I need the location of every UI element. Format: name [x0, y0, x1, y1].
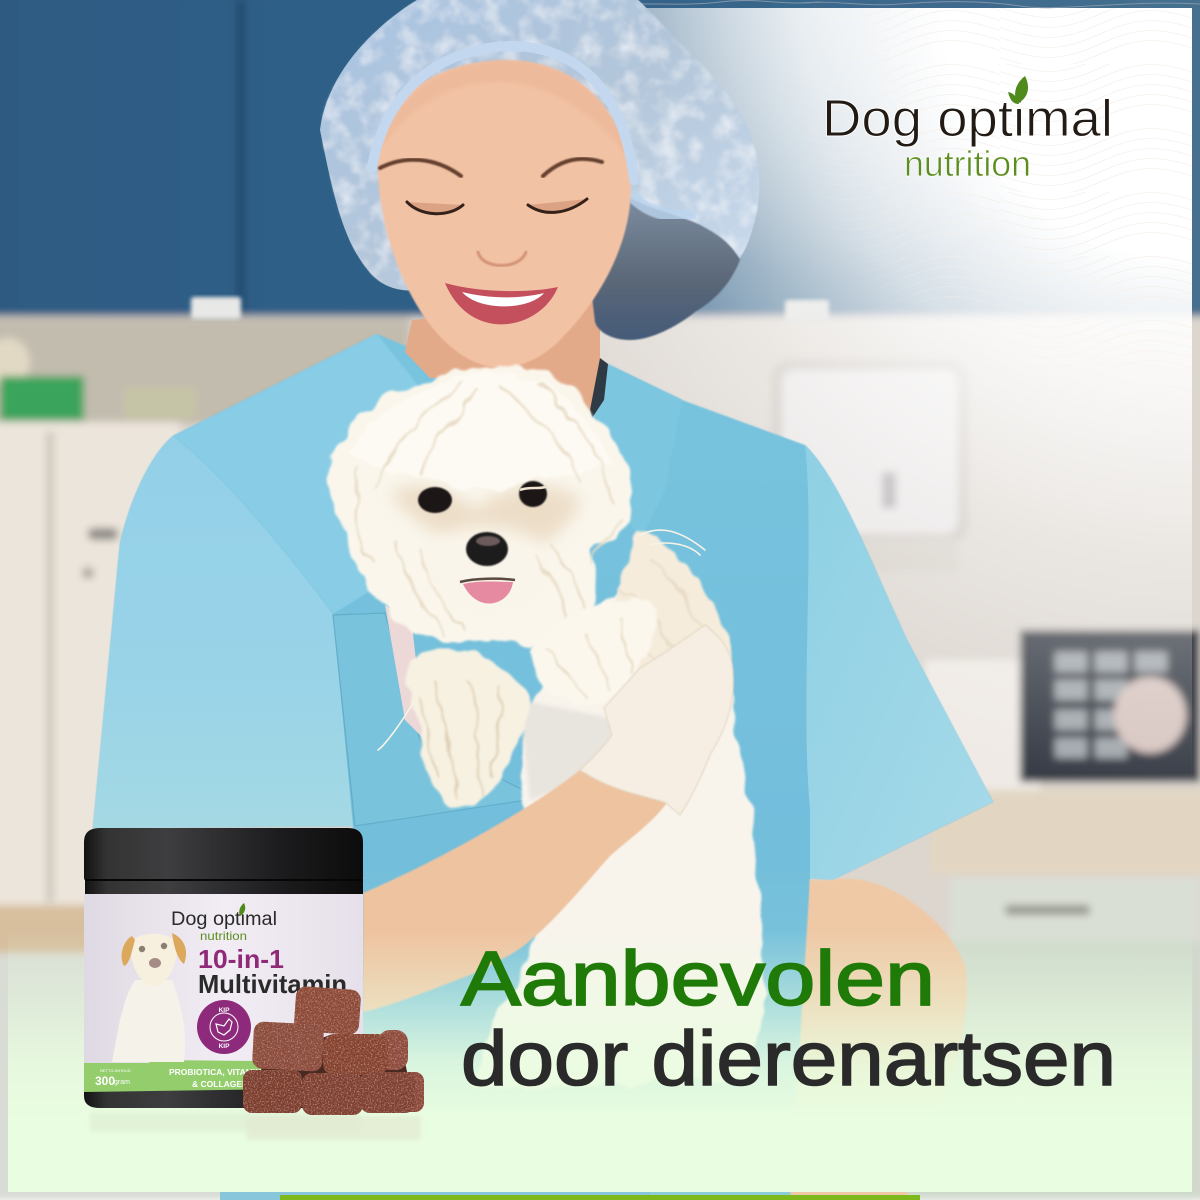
dog front leg left	[407, 650, 527, 806]
white box on counter	[925, 660, 1040, 830]
logo wordmark: Dog optimal	[822, 90, 1113, 148]
dog body on label	[112, 980, 185, 1062]
left counter	[0, 905, 290, 953]
tongue	[463, 582, 513, 603]
dog nose	[149, 958, 161, 968]
dog chest shadow	[520, 700, 620, 800]
dog muzzle	[417, 526, 553, 614]
logo sub-wordmark: nutrition	[904, 143, 1031, 184]
jar title Multivitamin: Multivitamin	[198, 969, 347, 999]
mouth line	[460, 579, 515, 582]
eye left	[418, 487, 452, 513]
hairnet upper	[320, 0, 759, 300]
dog fringe	[345, 371, 615, 490]
dog ear left	[122, 936, 135, 966]
scrubs top	[93, 334, 993, 1200]
right sleeve	[805, 445, 993, 880]
headline line 1: Aanbevolen	[461, 936, 935, 1022]
gap shadow between chews	[260, 1035, 410, 1100]
drawer handle	[1005, 905, 1090, 915]
top chew	[293, 986, 361, 1035]
weight: 300	[95, 1074, 115, 1088]
chew treats	[243, 986, 424, 1115]
dog wisps	[378, 530, 705, 750]
green fade overlay at bottom	[8, 930, 1192, 1192]
eye right	[528, 199, 587, 212]
band text line 2: & COLLAGEEN	[192, 1079, 254, 1089]
flavour badge	[197, 1000, 251, 1054]
left middle chew	[252, 1021, 324, 1072]
lower left unit	[0, 953, 290, 1200]
bottom middle chew	[302, 1073, 363, 1115]
weight unit: gram	[114, 1079, 130, 1086]
woman in blue scrubs	[93, 0, 993, 1200]
dog head	[328, 366, 633, 645]
right counter top	[930, 790, 1200, 875]
dog fur strokes	[355, 385, 715, 670]
eye left	[407, 202, 463, 214]
collar dark strip	[590, 358, 608, 418]
headline	[461, 936, 1116, 1102]
bottom left chew	[243, 1070, 302, 1113]
jar neck	[85, 880, 363, 896]
lower right unit	[800, 940, 1200, 1200]
dog face tan shading	[390, 486, 582, 556]
shoulder yoke	[173, 334, 430, 614]
dog head on label	[130, 934, 177, 987]
nose highlight	[476, 536, 500, 546]
jar neck shadow line	[85, 879, 363, 881]
jar green band	[84, 1060, 363, 1092]
badge chicken	[216, 1019, 232, 1035]
jar reflection	[90, 1112, 360, 1132]
solid band	[8, 1119, 1192, 1192]
treats reflection	[246, 1116, 421, 1140]
white fade overlay top right with wave pattern	[600, 8, 1192, 764]
dog front paw right	[530, 600, 654, 707]
dog shoulder fur	[616, 530, 732, 681]
top haze	[8, 8, 1192, 408]
frame edge wave strokes	[600, 0, 1200, 8]
dog ear right	[172, 933, 186, 964]
hairline shade	[380, 60, 630, 160]
left sleeve	[93, 436, 353, 828]
jar lid	[84, 828, 363, 881]
fade band	[8, 930, 1192, 1120]
dog eyes	[139, 943, 167, 952]
badge text bottom: KIP	[219, 1043, 230, 1050]
right forearm	[790, 879, 967, 1200]
jar logo nutrition: nutrition	[200, 929, 247, 943]
centre middle chew	[323, 1034, 388, 1075]
dog paw fur	[550, 620, 630, 700]
beige wall band	[0, 316, 1200, 1200]
logo: Dog optimal nutrition	[822, 76, 1113, 184]
mouth	[445, 283, 558, 324]
far right chew	[398, 1072, 424, 1112]
nose	[478, 252, 526, 266]
jar label dog	[112, 933, 186, 1062]
collar right	[590, 359, 682, 540]
neck	[405, 300, 600, 415]
face	[378, 60, 631, 367]
cabinet handle right	[785, 300, 829, 322]
dispenser window	[882, 472, 896, 508]
teeth	[462, 292, 544, 306]
pocket	[333, 613, 540, 826]
badge text top: KIP	[219, 1007, 230, 1014]
bottom right chew	[360, 1072, 415, 1113]
jar label	[84, 894, 363, 1064]
bottom edge photo strip	[220, 1192, 650, 1200]
eyebrow right	[543, 159, 602, 176]
appliance slot	[88, 528, 118, 540]
paper dispenser	[782, 370, 958, 534]
chew small right	[378, 1030, 408, 1070]
nose	[466, 532, 508, 566]
appliance button	[82, 567, 94, 579]
dark basket	[1020, 630, 1200, 782]
eyebrow left	[380, 160, 461, 176]
dispenser shelf	[858, 538, 958, 572]
dog body	[470, 580, 765, 1090]
paper dispenser shadow edge	[772, 360, 968, 542]
green box on shelf	[0, 376, 84, 421]
arm holding dog	[363, 770, 667, 1012]
left cabinet gap	[46, 432, 54, 902]
logo leaf	[1008, 76, 1028, 104]
hairnet lower dark lobe	[590, 195, 740, 340]
badge ring	[210, 1013, 238, 1041]
hairnet blue rim highlight	[628, 192, 690, 216]
bottom green bar	[280, 1195, 920, 1200]
gloved hand	[580, 625, 733, 815]
hairnet elastic band	[372, 46, 634, 180]
net label: NETTO-INHOUD	[100, 1068, 131, 1073]
shelf wall shade left	[0, 318, 410, 424]
wave pattern	[851, 8, 1192, 358]
blue wall cabinets	[0, 0, 1200, 316]
basket cells	[1055, 652, 1167, 758]
cabinet handle left	[191, 297, 241, 319]
jar logo leaf	[239, 903, 245, 916]
eye right	[519, 481, 547, 507]
shelf items	[125, 388, 195, 418]
cabinet door gap	[237, 0, 245, 315]
white fluffy dog	[328, 366, 765, 1090]
band text line 1: PROBIOTICA, VITAMINEN	[169, 1067, 273, 1077]
basket contents	[1114, 677, 1186, 753]
jar title 10-in-1: 10-in-1	[198, 944, 284, 974]
product jar	[84, 828, 421, 1140]
jar logo: Dog optimal	[171, 909, 277, 930]
name tag	[385, 605, 425, 740]
jar bottom	[84, 1085, 363, 1108]
right lower drawer	[950, 878, 1200, 940]
headline line 2: door dierenartsen	[461, 1016, 1116, 1102]
bowl on shelf	[0, 338, 30, 386]
left white cabinet	[0, 422, 180, 912]
dog leg fur	[420, 680, 501, 795]
eye right fur	[520, 486, 548, 490]
badge disc	[197, 1000, 251, 1054]
